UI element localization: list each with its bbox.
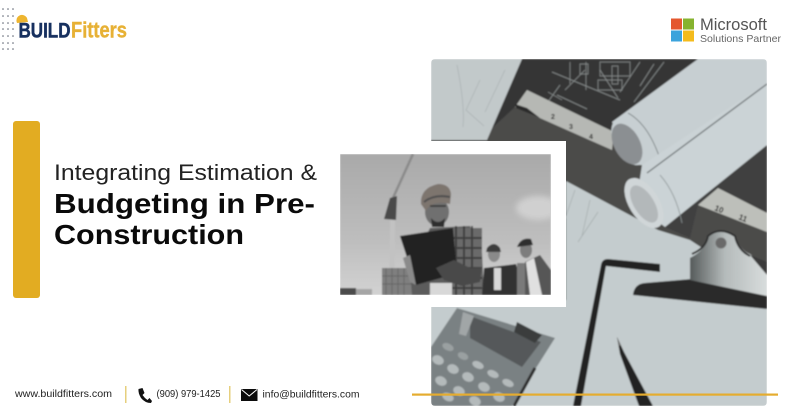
photo: blueprints, tape measure, clipboard and calculator xyxy=(431,59,767,408)
clipboard board edge xyxy=(573,259,660,406)
lower tape measure xyxy=(698,188,767,232)
upper tape measure: 4 xyxy=(589,134,593,141)
background building detail xyxy=(516,262,526,295)
footer contact xyxy=(14,386,360,403)
upper tape measure xyxy=(515,90,614,150)
accent bar xyxy=(13,121,40,298)
pen xyxy=(617,337,653,406)
clipboard held by worker xyxy=(400,228,456,285)
photo: construction workers xyxy=(340,154,560,295)
Microsoft four squares xyxy=(671,18,694,42)
logo: Microsoft Solutions Partner xyxy=(671,16,782,45)
cloud xyxy=(516,194,550,221)
title line 1: Integrating Estimation & xyxy=(54,160,317,185)
lower tape measure: 10 xyxy=(713,204,725,215)
upper tape measure: 3 xyxy=(569,124,573,131)
logo dot grid xyxy=(2,8,14,50)
footer divider 2 xyxy=(229,386,230,403)
email: info@buildfitters.com xyxy=(262,389,360,400)
calculator xyxy=(431,308,555,408)
upper left paper xyxy=(431,59,522,140)
Solutions Partner: Solutions Partner xyxy=(700,33,782,45)
logo: BuildFitters xyxy=(2,8,127,50)
worker hand xyxy=(436,260,482,286)
worker 3 xyxy=(517,239,551,295)
upper tape measure: 2 xyxy=(551,114,555,121)
footer divider 1 xyxy=(125,386,126,403)
main worker xyxy=(410,184,484,295)
icon: envelope xyxy=(241,389,258,401)
dark desk strip right xyxy=(665,145,767,238)
title line 3: Construction xyxy=(54,219,244,250)
blueprint sheet xyxy=(490,59,698,133)
phone number: (909) 979-1425 xyxy=(156,389,221,400)
logo wordmark BUILD: BUILD xyxy=(18,18,70,42)
logo hard hat xyxy=(16,15,28,23)
crane and building xyxy=(340,154,413,295)
logo wordmark Fitters: Fitters xyxy=(71,17,127,42)
clipboard clip xyxy=(633,231,767,309)
icon: phone xyxy=(138,388,152,403)
lower paper and clipboard sheet xyxy=(431,181,767,406)
title xyxy=(54,160,317,250)
white frame xyxy=(340,141,566,307)
Microsoft name: Microsoft xyxy=(700,16,767,34)
accent line xyxy=(412,394,778,396)
worker 2 xyxy=(482,243,518,295)
website: www.buildfitters.com xyxy=(14,389,112,400)
title line 2: Budgeting in Pre- xyxy=(54,188,315,219)
lower tape measure: 11 xyxy=(737,213,749,224)
blueprint roll 1 xyxy=(604,59,767,171)
blueprint roll 2 xyxy=(616,83,767,235)
